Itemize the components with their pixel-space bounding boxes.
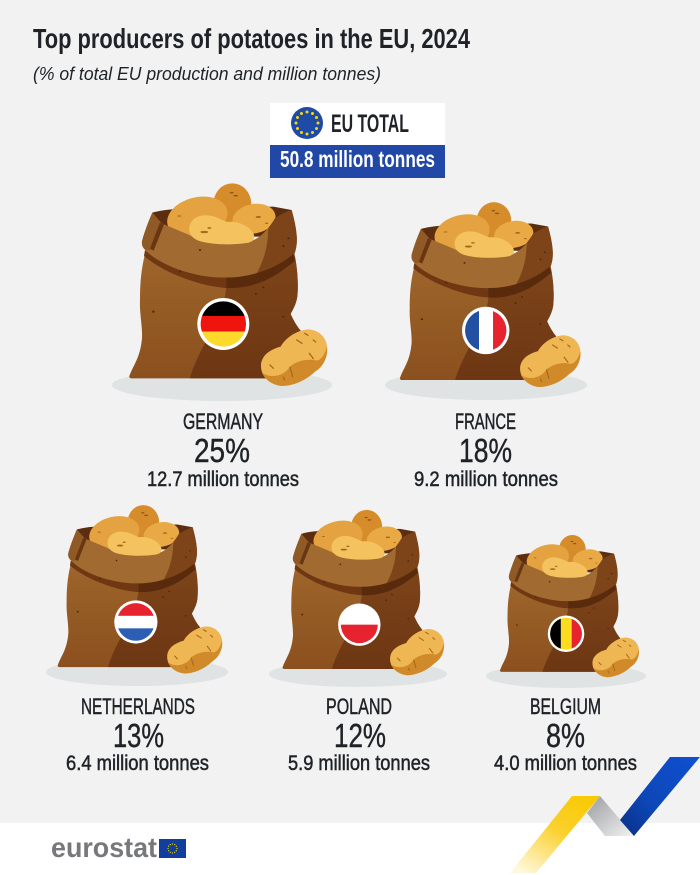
France share: 18% [459,432,512,469]
Germany label: GERMANY [183,409,263,434]
title: Top producers of potatoes in the EU, 2024 [33,23,470,54]
eurostat logo: eurostat [51,832,157,863]
EU total value: 50.8 million tonnes [280,146,435,172]
Poland share: 12% [334,717,386,754]
Germany share: 25% [194,432,250,469]
Poland tonnes: 5.9 million tonnes [288,752,430,775]
Belgium label: BELGIUM [530,694,601,719]
ribbon decoration [510,757,700,873]
Belgium tonnes: 4.0 million tonnes [494,752,637,775]
Netherlands label: NETHERLANDS [81,694,195,719]
sack shadow [46,658,228,686]
Poland label: POLAND [326,694,392,719]
icon: potato sack with French flag [400,202,581,387]
France label: FRANCE [455,409,516,434]
subtitle: (% of total EU production and million tonnes) [33,64,381,84]
sack shadow [385,370,587,400]
France tonnes: 9.2 million tonnes [414,468,558,491]
panel: Belgium [486,535,646,775]
footer band [0,823,700,875]
icon: potato sack with Dutch flag [58,505,222,673]
icon: potato sack with Belgian flag [500,535,639,677]
Germany tonnes: 12.7 million tonnes [147,468,299,491]
sack shadow [269,661,447,687]
sack shadow [112,369,332,401]
icon: EU flag circle [291,107,323,139]
panel: Poland [269,510,447,775]
EU total box [270,103,445,178]
Netherlands tonnes: 6.4 million tonnes [66,752,209,775]
icon: potato sack with Polish flag [283,510,444,675]
icon: potato sack with German flag [129,183,327,386]
Belgium share: 8% [546,717,585,754]
Netherlands share: 13% [113,717,164,754]
panel: Netherlands [46,505,228,775]
sack shadow [486,664,646,688]
panel: France [385,202,587,491]
icon: EU flag [159,839,186,858]
panel: Germany [112,183,332,491]
EU total label: EU TOTAL [331,110,409,138]
